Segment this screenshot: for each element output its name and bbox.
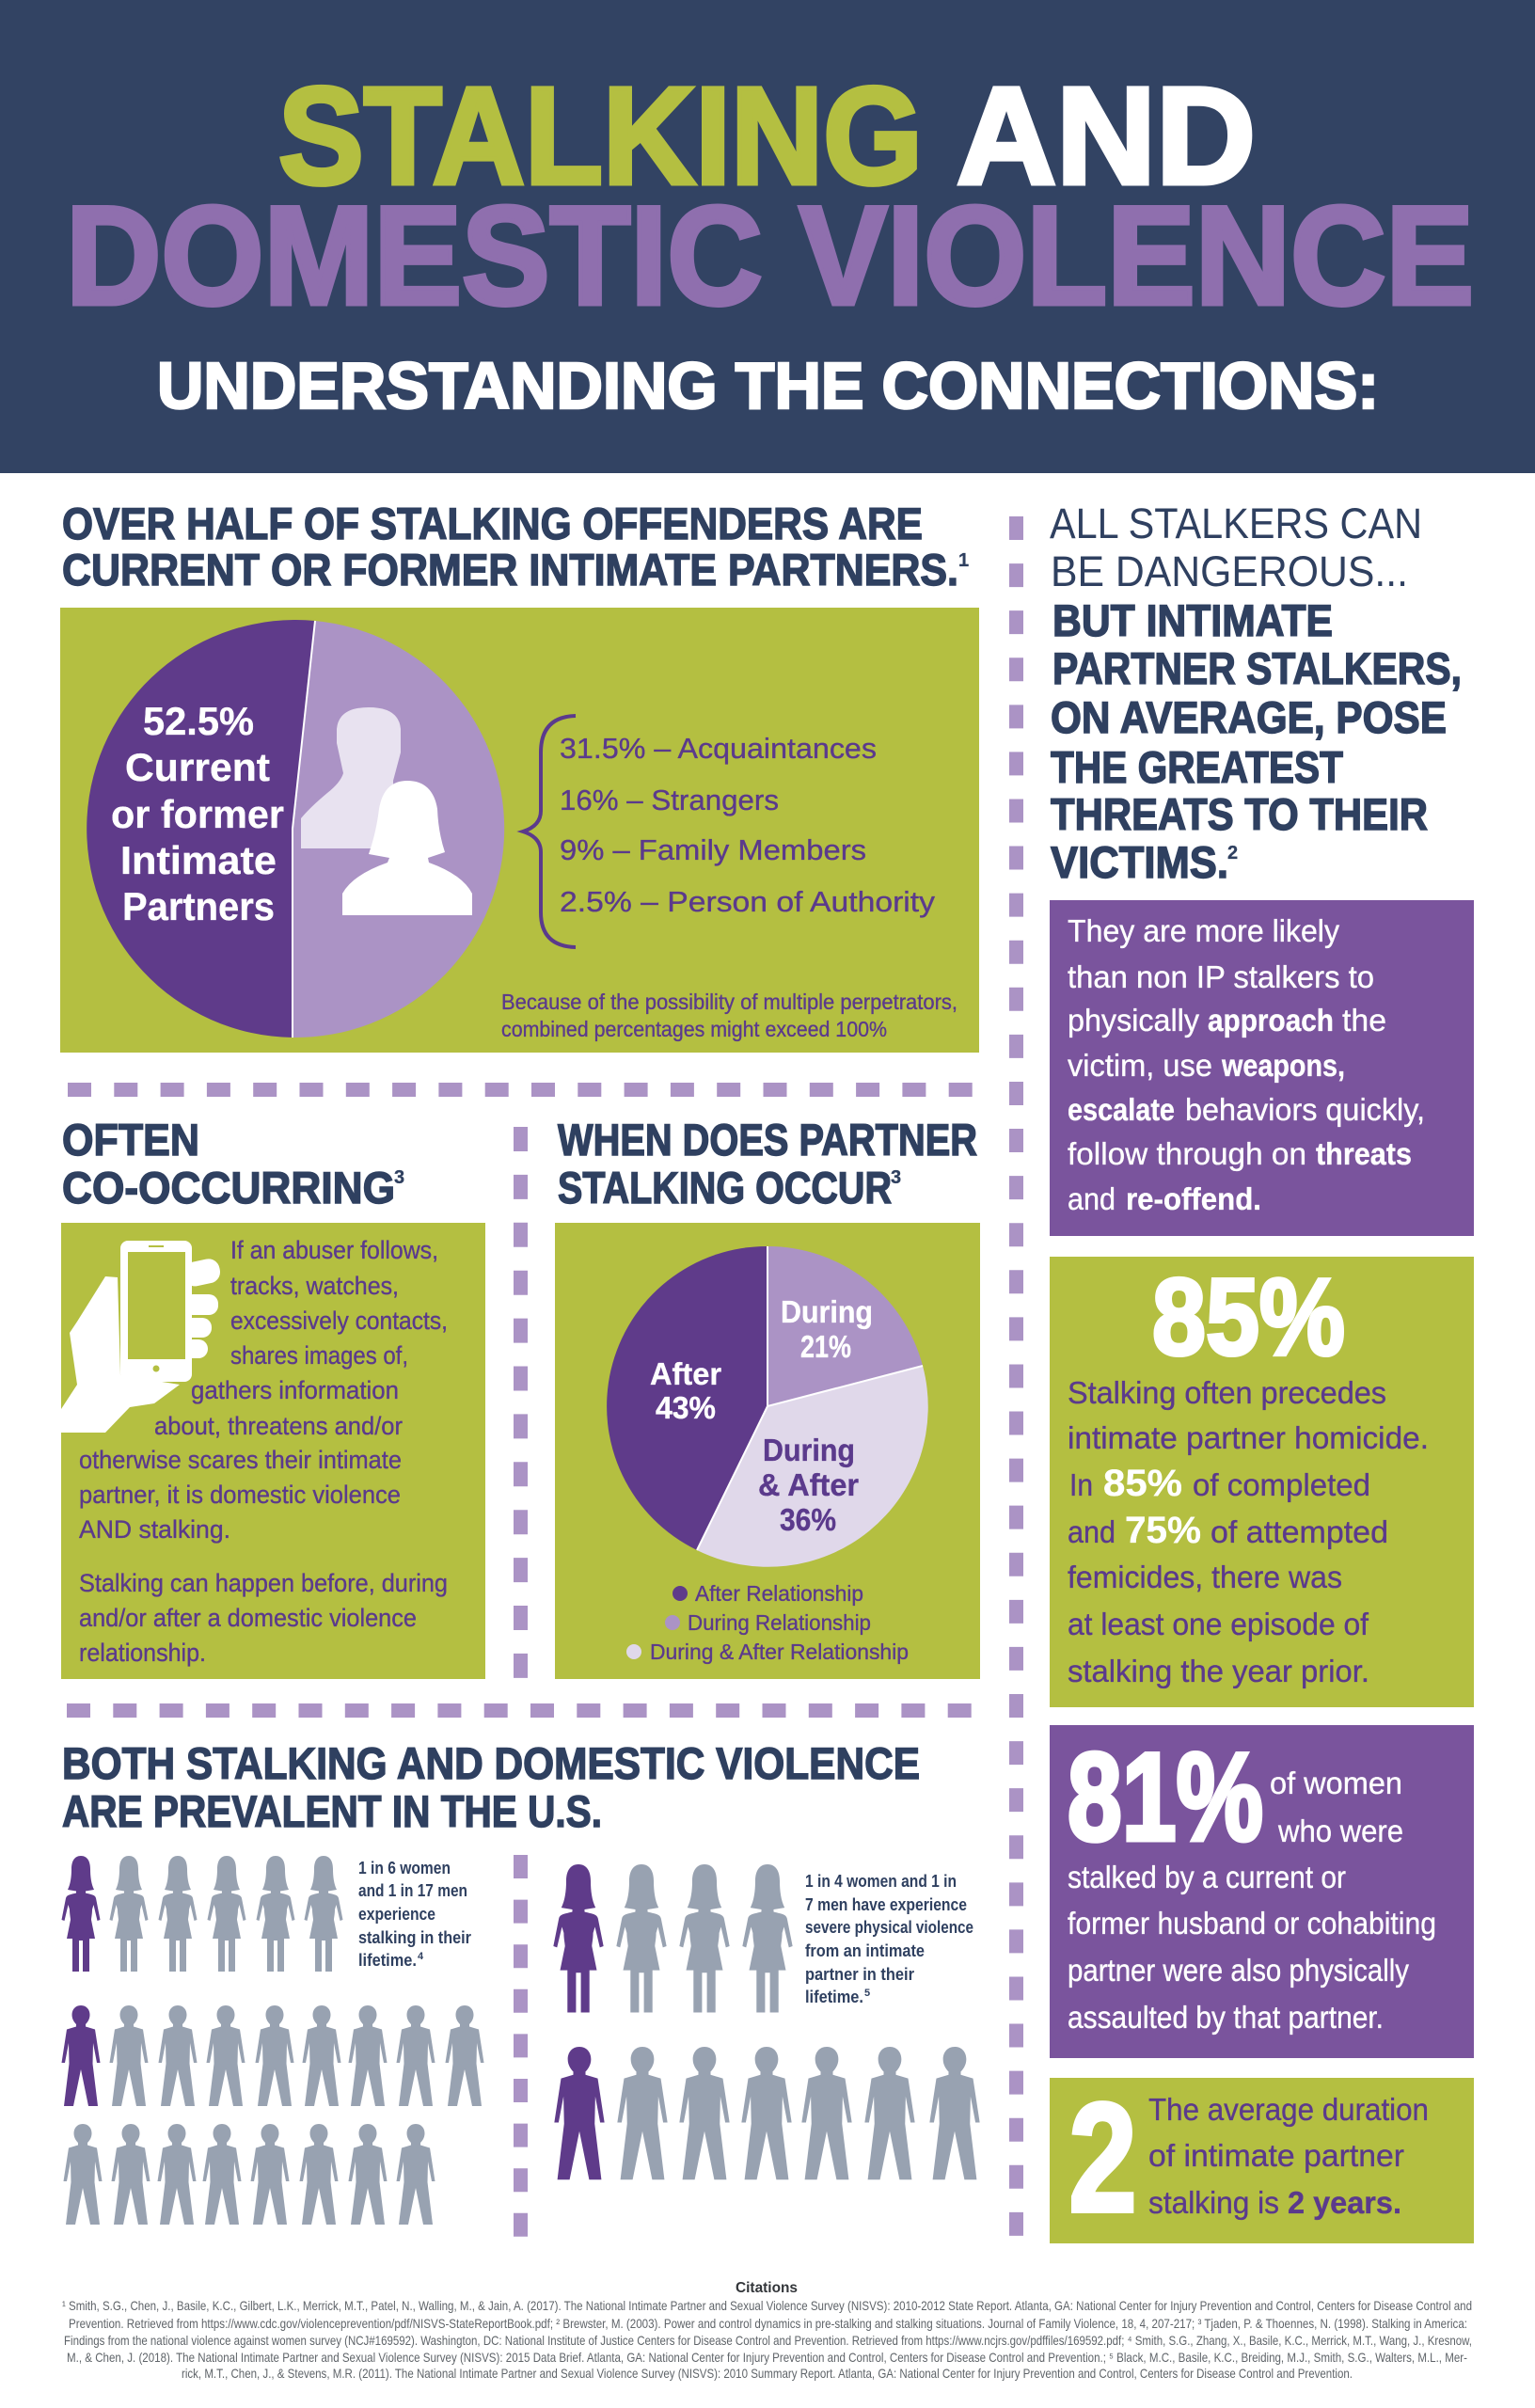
panel text: re-offend. bbox=[1126, 1181, 1261, 1216]
stat text: stalking lifetime: lifetime. bbox=[358, 1951, 417, 1970]
citations heading: Citations bbox=[736, 2280, 798, 2296]
co-occurring body text: partner, it is domestic violence bbox=[79, 1481, 401, 1509]
panel text: stalking is bbox=[1148, 2185, 1279, 2220]
title bbox=[66, 59, 1474, 334]
stat text: severe physical violence: lifetime. bbox=[805, 1988, 863, 2006]
panel text: 75% bbox=[1125, 1510, 1201, 1551]
panel: 85% homicide bbox=[1050, 1256, 1474, 1707]
co-occurring body text: and/or after a domestic violence bbox=[79, 1604, 417, 1632]
stat text: severe physical violence bbox=[805, 1872, 973, 2006]
stat text: stalking lifetime bbox=[358, 1859, 471, 1970]
panel text bbox=[1068, 913, 1425, 1216]
panel text: weapons, bbox=[1221, 1048, 1345, 1083]
panel text: intimate partner homicide. bbox=[1068, 1420, 1429, 1455]
other offender percentages bbox=[560, 732, 936, 918]
pie label: 52.5%: Partners bbox=[122, 884, 275, 928]
pie label: 52.5% bbox=[111, 699, 284, 928]
co-occurring body text: AND stalking. bbox=[79, 1515, 230, 1544]
heading: all stalkers can be dangerous: THREATS TO THEIR bbox=[1051, 789, 1428, 839]
co-occurring body text: shares images of, bbox=[230, 1341, 408, 1370]
heading: when does partner stalking occur: 3 bbox=[891, 1167, 901, 1188]
heading: all stalkers can be dangerous: 2 bbox=[1227, 843, 1238, 863]
panel text: approach bbox=[1208, 1003, 1334, 1038]
panel text: of women bbox=[1270, 1766, 1402, 1800]
co-occurring body text: excessively contacts, bbox=[230, 1307, 448, 1335]
heading: often co-occurring: 3 bbox=[394, 1167, 404, 1188]
heading: prevalence bbox=[62, 1738, 920, 1836]
heading: all stalkers can be dangerous: BE DANGEROUS... bbox=[1051, 547, 1408, 595]
heading: often co-occurring bbox=[62, 1115, 404, 1212]
stat text: severe physical violence: from an intimate bbox=[805, 1941, 925, 1960]
legend: During & After Relationship bbox=[650, 1640, 909, 1664]
stat text: severe physical violence: 1 in 4 women and 1 in bbox=[805, 1872, 957, 1891]
pictogram: 1 in 17 men bbox=[62, 2005, 483, 2225]
panel text bbox=[1148, 2092, 1429, 2220]
pie labels: 21% bbox=[800, 1329, 851, 1364]
panel text: than non IP stalkers to bbox=[1068, 959, 1374, 994]
pictogram: 1 in 6 women bbox=[62, 1856, 342, 1972]
stat text: stalking lifetime: experience bbox=[358, 1905, 435, 1924]
panel text: victim, use bbox=[1068, 1048, 1212, 1083]
pie labels: 43% bbox=[656, 1390, 716, 1425]
note: combined percentages might exceed 100% bbox=[501, 1017, 887, 1041]
stat text: stalking lifetime: 4 bbox=[418, 1951, 424, 1962]
panel text: and bbox=[1068, 1181, 1116, 1216]
note: Because of the possibility of multiple perpetrators, bbox=[501, 990, 957, 1014]
note bbox=[501, 990, 957, 1041]
heading: over half of stalking offenders: OVER HALF OF STALKING OFFENDERS ARE bbox=[62, 499, 923, 548]
stat text: severe physical violence: 7 men have experience bbox=[805, 1895, 967, 1914]
pie labels: During bbox=[781, 1294, 873, 1329]
co-occurring body text: If an abuser follows, bbox=[230, 1236, 438, 1264]
heading: all stalkers can be dangerous: THE GREATEST bbox=[1051, 742, 1343, 792]
title: STALKING bbox=[278, 59, 923, 214]
stat text: stalking lifetime: and 1 in 17 men bbox=[358, 1881, 467, 1900]
stat text: severe physical violence: partner in their bbox=[805, 1965, 914, 1984]
heading: all stalkers can be dangerous: PARTNER STALKERS, bbox=[1052, 643, 1462, 693]
panel text: threats bbox=[1316, 1136, 1412, 1171]
pie labels: 36% bbox=[780, 1502, 836, 1537]
panel: more likely bbox=[1050, 900, 1474, 1236]
co-occurring body text: Stalking can happen before, during bbox=[79, 1569, 448, 1597]
stat text: stalking lifetime: 1 in 6 women bbox=[358, 1859, 451, 1877]
heading: over half of stalking offenders bbox=[62, 499, 969, 594]
heading: often co-occurring: CO-OCCURRING bbox=[62, 1163, 395, 1212]
panel text: at least one episode of bbox=[1068, 1607, 1369, 1641]
big number: 85%: 85% bbox=[1152, 1256, 1345, 1378]
citations text bbox=[62, 2298, 1472, 2381]
icon: hand holding phone bbox=[61, 1241, 222, 1433]
panel text: who were bbox=[1277, 1814, 1403, 1848]
pictogram: 1 in 7 men bbox=[554, 2047, 980, 2179]
panel text: 85% bbox=[1103, 1463, 1182, 1504]
title: DOMESTIC VIOLENCE bbox=[66, 177, 1474, 334]
panel text: In bbox=[1069, 1467, 1093, 1502]
panel text: of completed bbox=[1193, 1467, 1370, 1502]
heading: all stalkers can be dangerous: VICTIMS. bbox=[1051, 837, 1228, 887]
panel text: Stalking often precedes bbox=[1068, 1375, 1386, 1410]
icon: male silhouette bbox=[301, 707, 401, 848]
heading: all stalkers can be dangerous: ON AVERAGE, POSE bbox=[1051, 692, 1447, 742]
pie labels: During bbox=[763, 1433, 855, 1467]
heading: when does partner stalking occur: STALKING OCCUR bbox=[558, 1163, 892, 1212]
heading: over half of stalking offenders: CURRENT OR FORMER INTIMATE PARTNERS. bbox=[62, 545, 958, 594]
co-occurring body text: tracks, watches, bbox=[230, 1272, 399, 1300]
heading: all stalkers can be dangerous: ALL STALKERS CAN bbox=[1050, 499, 1422, 547]
brace bbox=[523, 716, 576, 947]
stat text: stalking lifetime: stalking in their bbox=[358, 1928, 471, 1947]
subtitle: UNDERSTANDING THE CONNECTIONS: bbox=[157, 349, 1379, 422]
panel text: The average duration bbox=[1148, 2092, 1429, 2127]
panel text: the bbox=[1342, 1003, 1386, 1038]
panel text bbox=[1068, 1375, 1429, 1688]
panel: when does stalking occur bbox=[555, 1223, 980, 1679]
heading: when does partner stalking occur: WHEN DOES PARTNER bbox=[558, 1115, 977, 1164]
panel text: and bbox=[1068, 1514, 1116, 1549]
heading: over half of stalking offenders: 1 bbox=[958, 550, 969, 571]
other offender percentages: 9% – Family Members bbox=[560, 833, 866, 866]
pie labels bbox=[650, 1294, 873, 1537]
panel: average duration bbox=[1050, 2071, 1474, 2245]
legend: During Relationship bbox=[688, 1610, 871, 1635]
legend bbox=[626, 1581, 909, 1664]
panel text: former husband or cohabiting bbox=[1068, 1906, 1436, 1941]
panel text: stalked by a current or bbox=[1068, 1860, 1346, 1894]
co-occurring body text: gathers information bbox=[191, 1376, 399, 1404]
panel: often co-occurring bbox=[61, 1223, 485, 1679]
panel text: of attempted bbox=[1211, 1514, 1388, 1549]
legend: After Relationship bbox=[695, 1581, 863, 1606]
panel text: 2 years. bbox=[1288, 2185, 1401, 2220]
panel text: physically bbox=[1068, 1003, 1199, 1038]
heading: all stalkers can be dangerous bbox=[1050, 499, 1462, 887]
heading: when does partner stalking occur bbox=[558, 1115, 977, 1212]
pie labels: After bbox=[650, 1356, 721, 1391]
pie chart: timing bbox=[607, 1246, 928, 1567]
panel text: partner were also physically bbox=[1068, 1953, 1409, 1988]
pie label: 52.5%: Intimate bbox=[120, 838, 277, 882]
panel text: assaulted by that partner. bbox=[1068, 2000, 1384, 2035]
panel text: of intimate partner bbox=[1148, 2138, 1404, 2173]
heading: prevalence: BOTH STALKING AND DOMESTIC VIOLENCE bbox=[62, 1738, 920, 1788]
panel text: stalking the year prior. bbox=[1068, 1654, 1369, 1688]
other offender percentages: 2.5% – Person of Authority bbox=[560, 885, 936, 918]
pie label: 52.5%: Current bbox=[125, 745, 270, 789]
pictogram: 1 in 4 women bbox=[553, 1864, 793, 2012]
panel text: follow through on bbox=[1068, 1136, 1306, 1171]
other offender percentages: 31.5% – Acquaintances bbox=[560, 732, 877, 765]
pie chart: offenders bbox=[87, 620, 504, 1038]
title: AND bbox=[957, 59, 1256, 214]
panel text: behaviors quickly, bbox=[1185, 1092, 1425, 1127]
big number: 2: 2 bbox=[1068, 2071, 1137, 2245]
heading: often co-occurring: OFTEN bbox=[62, 1115, 199, 1164]
stat text: severe physical violence: 5 bbox=[864, 1988, 870, 1999]
big number: 81%: 81% bbox=[1068, 1728, 1263, 1867]
panel text bbox=[1068, 1766, 1436, 2035]
header banner bbox=[0, 0, 1535, 473]
panel text: They are more likely bbox=[1068, 913, 1339, 948]
icon: female silhouette bbox=[342, 781, 472, 915]
co-occurring body text: otherwise scares their intimate bbox=[79, 1446, 402, 1474]
pie label: 52.5%: or former bbox=[111, 792, 284, 836]
pie label: 52.5%: 52.5% bbox=[143, 699, 254, 743]
co-occurring body text: about, threatens and/or bbox=[154, 1412, 403, 1440]
panel text: escalate bbox=[1068, 1092, 1175, 1127]
panel: intimate partner pie bbox=[60, 608, 979, 1053]
panel: 81% of women bbox=[1050, 1725, 1474, 2058]
heading: all stalkers can be dangerous: BUT INTIMATE bbox=[1052, 595, 1333, 645]
stat text: severe physical violence: severe physical violence bbox=[805, 1918, 973, 1937]
other offender percentages: 16% – Strangers bbox=[560, 784, 779, 816]
pie labels: & After bbox=[758, 1467, 859, 1502]
panel text: femicides, there was bbox=[1068, 1560, 1342, 1594]
co-occurring body text: relationship. bbox=[79, 1639, 206, 1667]
co-occurring body text bbox=[79, 1236, 448, 1667]
heading: prevalence: ARE PREVALENT IN THE U.S. bbox=[62, 1786, 602, 1836]
